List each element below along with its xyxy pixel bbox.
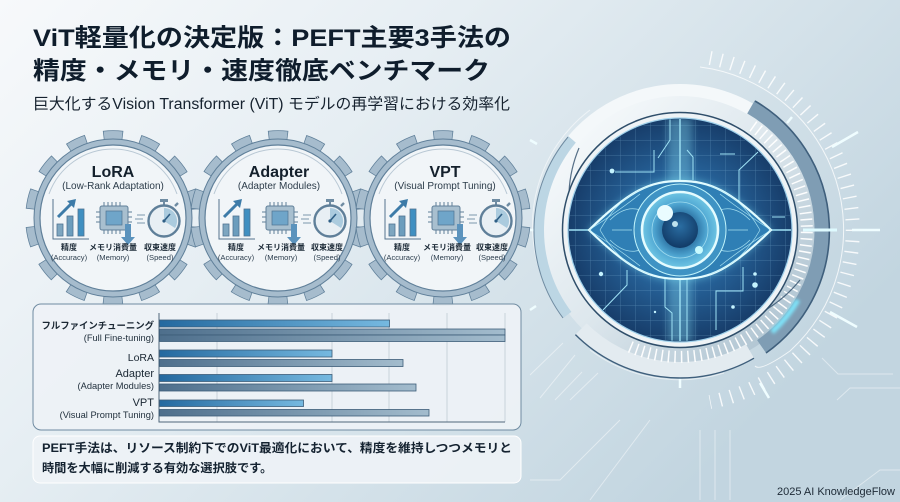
label: Adapter: (Adapter Modules) bbox=[78, 381, 154, 391]
label: full fine-tuning: (Full Fine-tuning) bbox=[84, 333, 154, 343]
gear: VPT: (Visual Prompt Tuning) bbox=[394, 181, 496, 192]
gear: VPT: (Accuracy) bbox=[384, 253, 421, 262]
subtitle: 巨大化するVision Transformer (ViT) モデルの再学習における効率化 bbox=[33, 94, 510, 113]
bars: LoRA bbox=[160, 350, 403, 366]
gear: LoRA: (Low-Rank Adaptation) bbox=[62, 181, 164, 192]
outer metal ring bbox=[552, 102, 808, 358]
callout: summary bbox=[33, 436, 521, 483]
gear: Adapter: (Speed) bbox=[313, 253, 341, 262]
bars: Adapter bbox=[160, 374, 416, 391]
gear: VPT bbox=[361, 136, 525, 300]
gear: Adapter: Adapter bbox=[249, 164, 309, 181]
label: full fine-tuning: フルファインチューニング bbox=[41, 320, 155, 331]
gear: LoRA: 収束速度 bbox=[144, 242, 176, 252]
gear: Adapter: (Adapter Modules) bbox=[238, 181, 320, 192]
left light band bbox=[539, 139, 572, 315]
gear: LoRA: LoRA bbox=[92, 164, 135, 181]
tick marks ring bbox=[530, 58, 880, 402]
gear: Adapter: (Accuracy) bbox=[218, 253, 255, 262]
gear: Adapter: 精度 bbox=[228, 242, 244, 252]
callout: summary: PEFT手法は、リソース制約下でのViT最適化において、精度を維持しつつメモリと bbox=[42, 440, 512, 455]
label: Adapter bbox=[78, 368, 154, 391]
gear: LoRA: (Speed) bbox=[146, 253, 174, 262]
bars: full fine-tuning bbox=[160, 320, 505, 342]
label: LoRA: LoRA bbox=[128, 352, 154, 364]
gear: Adapter: (Memory) bbox=[265, 253, 298, 262]
gear: Adapter: メモリ消費量 bbox=[257, 242, 305, 252]
inner tick band bbox=[626, 126, 807, 357]
eye almond bbox=[589, 181, 771, 279]
gear: VPT: VPT bbox=[429, 164, 461, 181]
gear: VPT: 収束速度 bbox=[476, 242, 508, 252]
gear: LoRA: (Accuracy) bbox=[51, 253, 88, 262]
label: full fine-tuning bbox=[41, 320, 155, 343]
eye glow bbox=[588, 180, 772, 280]
credit: 2025 AI KnowledgeFlow bbox=[777, 486, 895, 498]
gear: VPT: (Speed) bbox=[478, 253, 506, 262]
gear: VPT: 精度 bbox=[394, 242, 410, 252]
background circuit lines bbox=[530, 343, 900, 500]
gear: Adapter bbox=[196, 136, 360, 300]
label: VPT bbox=[60, 397, 154, 420]
pupil bbox=[662, 212, 698, 248]
gear: Adapter: 収束速度 bbox=[311, 242, 343, 252]
title bbox=[33, 24, 511, 85]
icon: eye lens bbox=[530, 58, 880, 402]
upper silver arc bbox=[573, 90, 750, 140]
gear: LoRA bbox=[31, 136, 195, 300]
title: ViT軽量化の決定版：PEFT主要3手法の bbox=[33, 24, 511, 52]
label: VPT: VPT bbox=[133, 397, 154, 409]
gear: VPT: (Memory) bbox=[431, 253, 464, 262]
gear: VPT: メモリ消費量 bbox=[423, 242, 471, 252]
title: 精度・メモリ・速度徹底ベンチマーク bbox=[33, 57, 490, 85]
callout: summary: 時間を大幅に削減する有効な選択肢です。 bbox=[42, 460, 272, 475]
gear: LoRA: メモリ消費量 bbox=[89, 242, 137, 252]
silver crescent bbox=[581, 329, 750, 370]
label: VPT: (Visual Prompt Tuning) bbox=[60, 410, 154, 420]
lens grid bbox=[569, 119, 791, 341]
panel: benchmark bar chart bbox=[33, 304, 521, 430]
gear: LoRA: 精度 bbox=[61, 242, 77, 252]
right steel band bbox=[751, 107, 822, 346]
label: Adapter: Adapter bbox=[115, 368, 154, 380]
bars: VPT bbox=[160, 400, 429, 416]
gear: LoRA: (Memory) bbox=[97, 253, 130, 262]
iris bbox=[634, 184, 726, 276]
highlights bbox=[657, 205, 703, 254]
